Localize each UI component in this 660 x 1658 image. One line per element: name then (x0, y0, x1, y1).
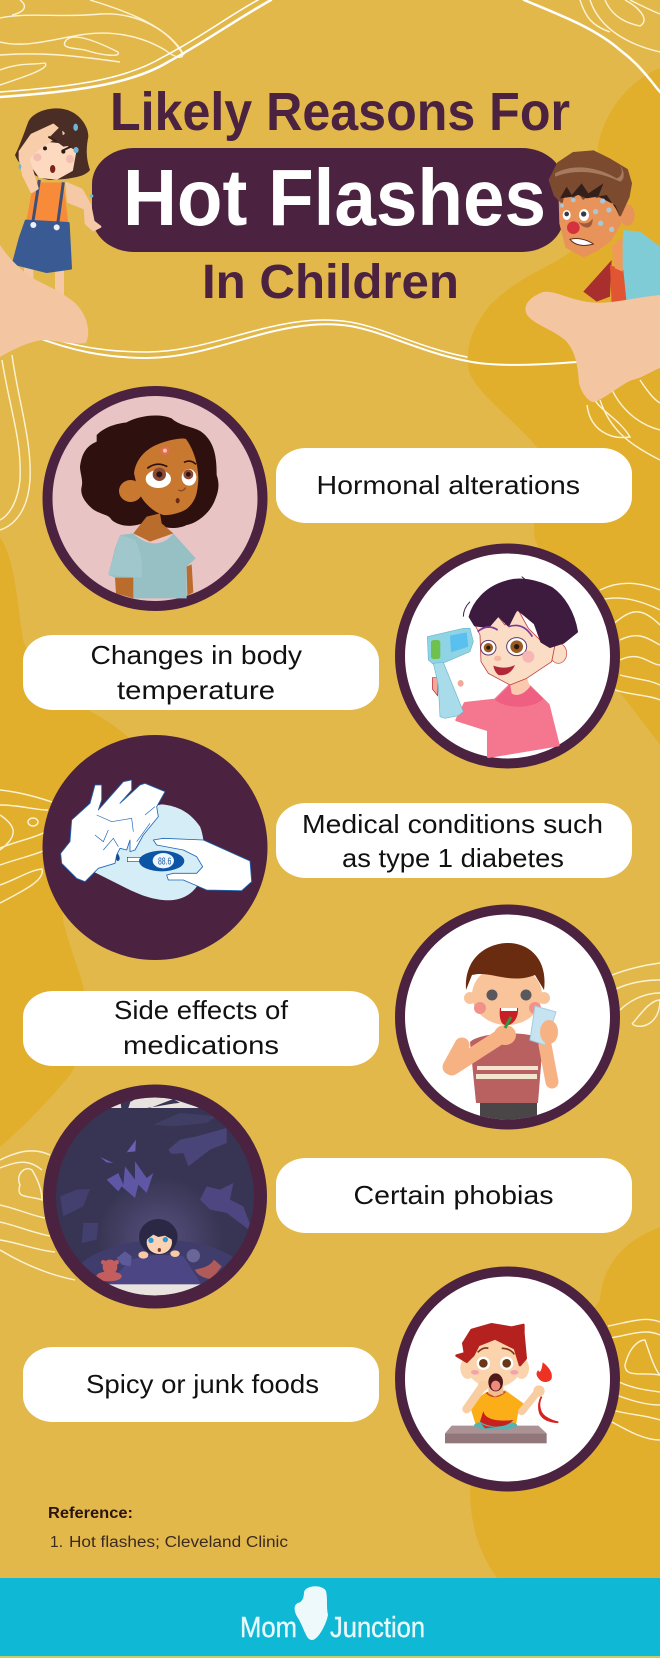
label: changes in body temperature (23, 635, 379, 710)
heading line 3: In Children (202, 256, 459, 309)
reference: Hot flashes; Cleveland Clinic (69, 1534, 288, 1551)
reference (48, 1505, 288, 1551)
heading pill (92, 148, 564, 252)
panel: type 1 diabetes image (42, 735, 268, 960)
label: medical conditions: as type 1 diabetes (342, 843, 564, 873)
heading line 1: Likely Reasons For (110, 82, 570, 142)
logo text: Mom (240, 1612, 297, 1644)
label: medical conditions (276, 803, 632, 878)
footer band: Junction (330, 1612, 425, 1644)
decorative peach shapes (0, 245, 660, 402)
label: certain phobias (276, 1158, 632, 1233)
title (92, 82, 570, 309)
panel: spicy foods image (400, 1272, 615, 1486)
label: hormonal alterations (276, 448, 632, 523)
label: changes in body temperature: Changes in body (90, 640, 302, 670)
panel: type 1 diabetes image: 88.6 (158, 857, 172, 868)
panel: hormonal alterations image (48, 391, 262, 606)
label: spicy or junk foods (23, 1347, 379, 1422)
label: side effects of medications: Side effects of (114, 995, 289, 1025)
illustration: stressed girl (13, 108, 100, 295)
heading line 2: Hot Flashes (123, 153, 546, 242)
label: side effects of medications (23, 991, 379, 1066)
label: spicy or junk foods: Spicy or junk foods (86, 1369, 319, 1399)
illustration: sweating boy (550, 152, 660, 305)
label: medical conditions: Medical conditions such (302, 809, 603, 839)
panel: medications image (400, 910, 615, 1125)
panel: body temperature image (400, 548, 615, 764)
panel: phobias image (49, 1090, 261, 1302)
footer band (0, 1578, 660, 1658)
label: certain phobias: Certain phobias (354, 1180, 554, 1210)
label: hormonal alterations: Hormonal alterations (316, 470, 580, 500)
label: changes in body temperature: temperature (117, 675, 275, 705)
label: side effects of medications: medications (123, 1030, 279, 1060)
reference: Reference: (48, 1505, 133, 1522)
logo icon (295, 1586, 328, 1640)
reference: 1. (50, 1534, 63, 1551)
